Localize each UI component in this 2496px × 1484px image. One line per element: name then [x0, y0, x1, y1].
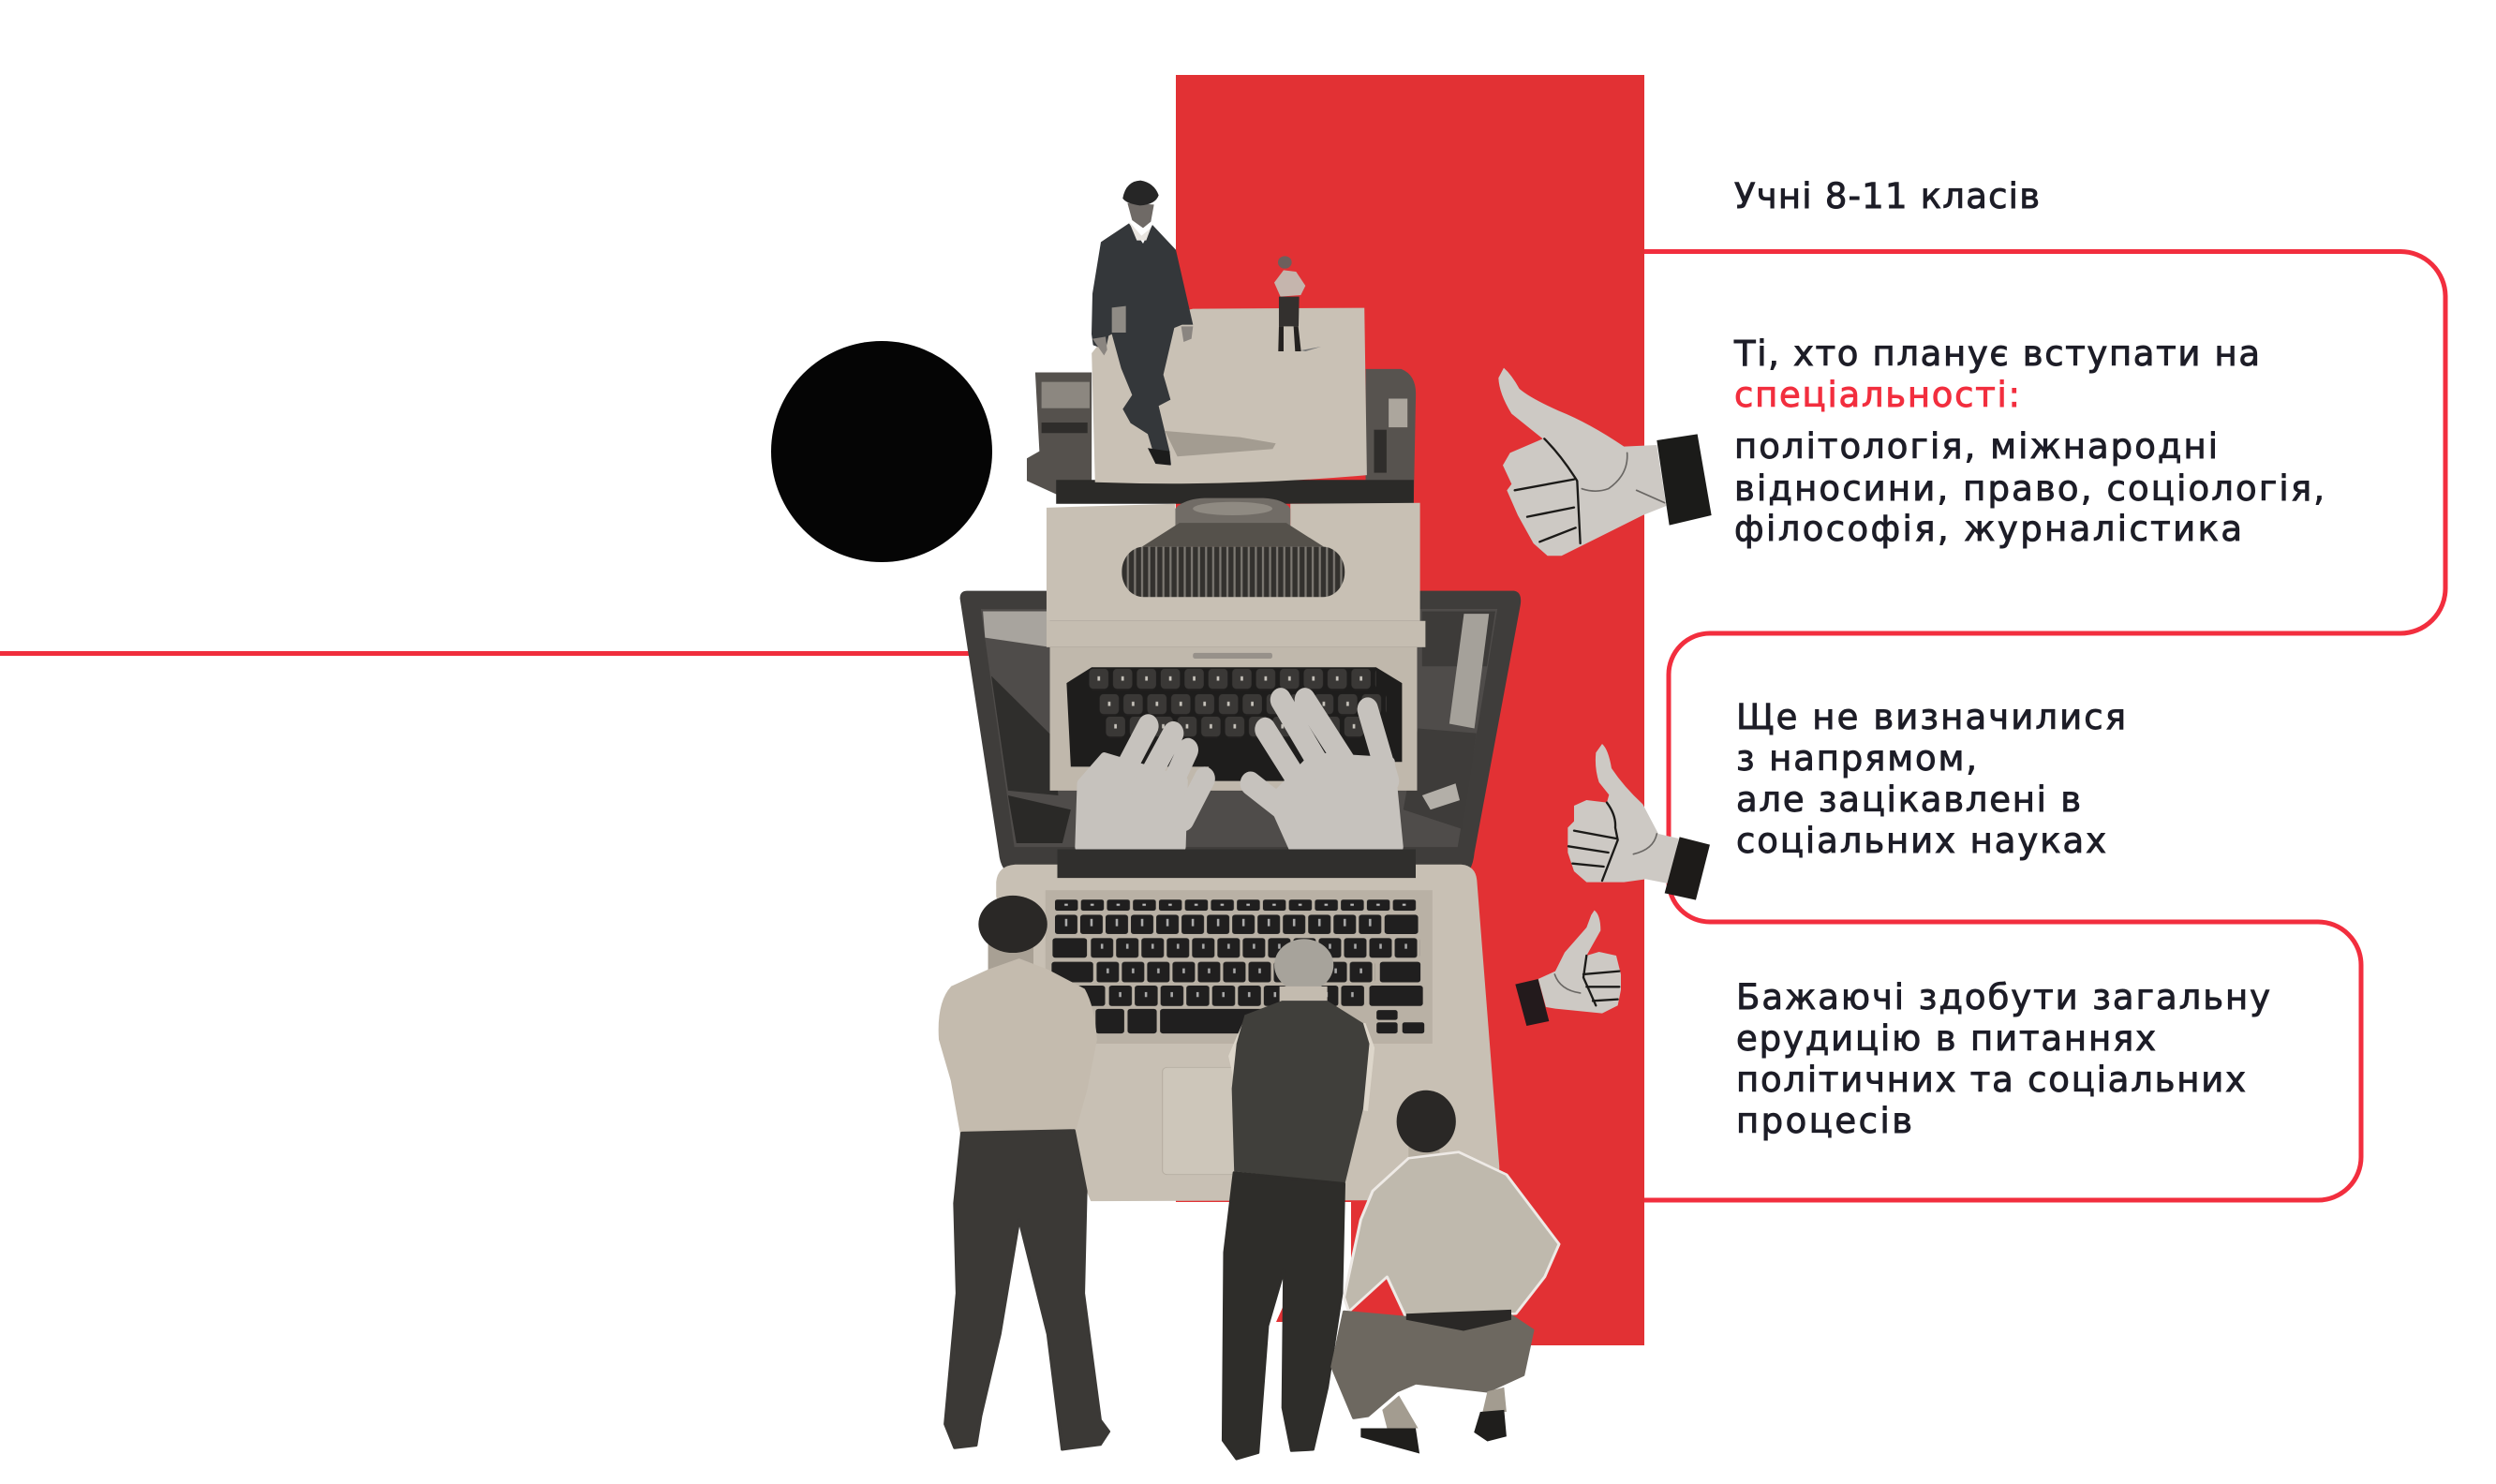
red background panel	[1176, 75, 1644, 1345]
text block: undecided: але зацікавлені в	[1736, 779, 2081, 820]
red wedge between legs	[1276, 1293, 1289, 1322]
left hand	[1079, 726, 1205, 847]
typewriter carriage sides	[1027, 369, 1416, 504]
left red line	[0, 651, 974, 656]
laptop keyboard	[1046, 890, 1433, 1044]
black circle	[771, 341, 992, 562]
text block: general erudition: ерудицію в питаннях	[1736, 1018, 2156, 1059]
man three crouching	[1332, 1091, 1559, 1454]
icons: medium and small thumbs up	[1515, 744, 1710, 1026]
laptop base	[996, 865, 1499, 1201]
outline connecting the audience cards	[1644, 251, 2445, 1200]
icon: large thumbs up	[1498, 368, 1712, 556]
laptop and typewriter collage	[960, 308, 1521, 877]
man shadow on paper	[1165, 431, 1276, 456]
text block: undecided: Ще не визначилися	[1736, 697, 2126, 737]
laptop hinge	[1057, 850, 1416, 878]
paper sheet	[1092, 308, 1367, 483]
man two in vest	[1223, 939, 1374, 1459]
text block: undecided: соціальних науках	[1736, 821, 2106, 861]
man in bowler hat and small figure on paper	[1092, 181, 1321, 466]
typewriter lower body with keys	[1050, 647, 1417, 791]
man in bowler hat	[1092, 181, 1193, 466]
typewriter upper body	[1047, 498, 1425, 647]
laptop screen	[960, 591, 1521, 877]
typing hands	[1079, 700, 1399, 847]
text block: planning to enter specialities: спеціальності:	[1734, 375, 2020, 415]
text block: undecided: з напрямом,	[1736, 738, 1977, 779]
icon: small thumbs up	[1515, 911, 1621, 1026]
small figure	[1274, 256, 1321, 351]
text block: general erudition: процесів	[1736, 1101, 1912, 1141]
text block: planning to enter specialities: відносини, право, соціологія,	[1734, 468, 2325, 509]
white cut-out below laptop	[1171, 1202, 1351, 1350]
text block: general erudition	[1736, 977, 2270, 1141]
text block: general erudition: політичних та соціальних	[1736, 1060, 2246, 1100]
text block: planning to enter specialities	[1733, 334, 2325, 549]
right hand	[1251, 700, 1399, 847]
text block: undecided	[1736, 697, 2126, 861]
text block: general erudition: Бажаючі здобути загальну	[1736, 977, 2270, 1017]
laptop trackpad	[1163, 1067, 1248, 1175]
heading: pupils of grades 8-11: Учні 8-11 класів	[1734, 176, 2040, 216]
laptop base and three men	[940, 850, 1559, 1459]
text block: planning to enter specialities: філософія, журналістика	[1734, 509, 2242, 549]
icon: medium thumbs up	[1567, 744, 1710, 900]
text block: planning to enter specialities: політологія, міжнародні	[1734, 426, 2218, 467]
text block: planning to enter specialities: Ті, хто планує вступати на	[1733, 334, 2260, 374]
man one standing	[940, 896, 1109, 1449]
